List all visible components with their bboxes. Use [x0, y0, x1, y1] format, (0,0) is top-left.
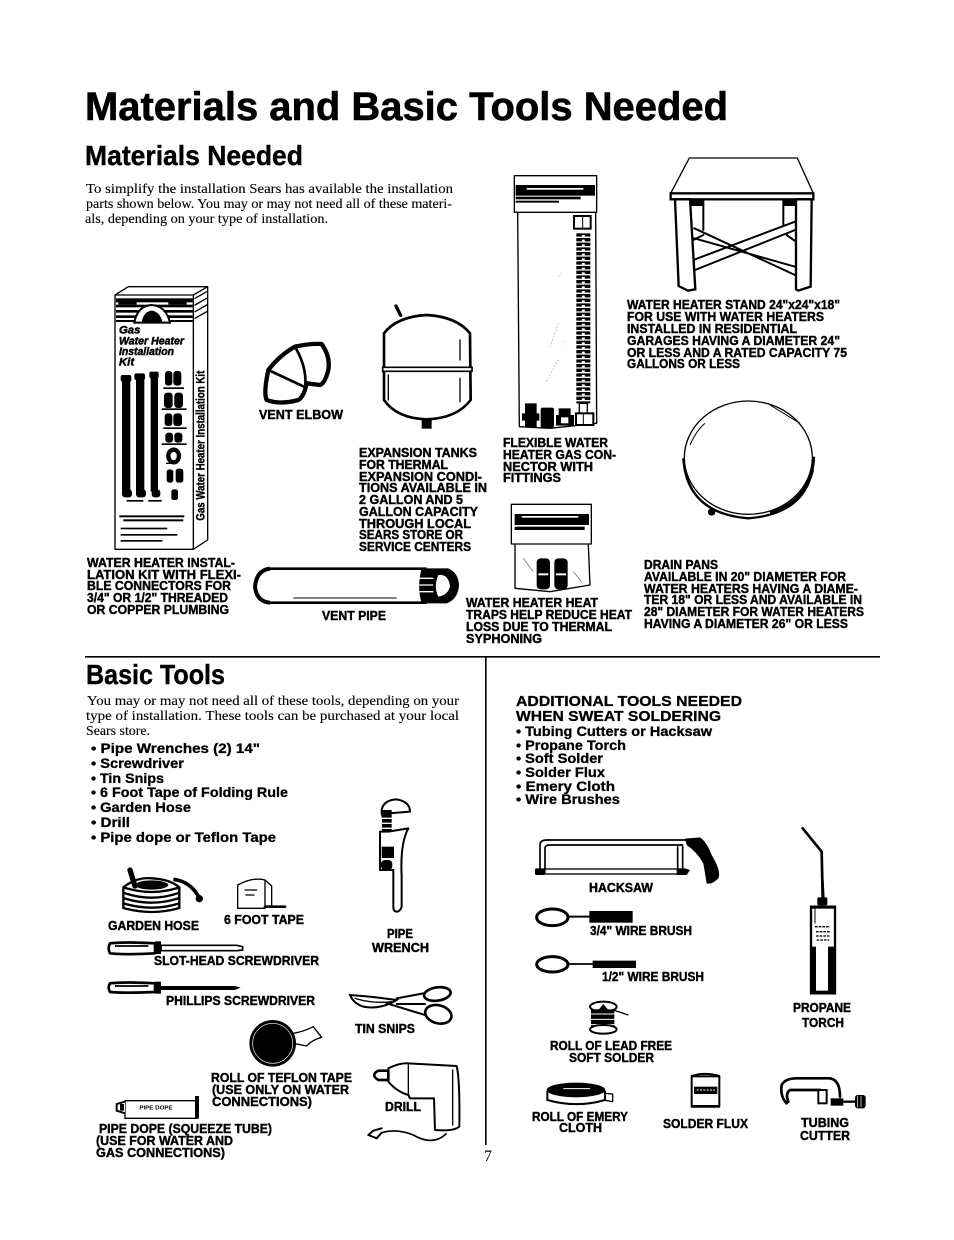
label: tubing cutter: TUBING	[801, 1116, 849, 1130]
label: vent pipe: VENT PIPE	[322, 609, 386, 623]
text block: basic tools intro	[86, 694, 459, 739]
label: drain pans: TER 18" OR LESS AND AVAILABLE IN	[644, 593, 862, 607]
label: pipe wrench: WRENCH	[372, 941, 429, 955]
label: teflon tape: CONNECTIONS)	[212, 1095, 312, 1109]
label: pipe wrench: PIPE	[387, 927, 413, 941]
label: water heater stand: GARAGES HAVING A DIAMETER 24"	[627, 334, 840, 348]
label: drain pans: AVAILABLE IN 20" DIAMETER FOR	[644, 570, 846, 584]
icon: tubing cutter	[781, 1078, 866, 1108]
label: lead free solder: ROLL OF LEAD FREE	[550, 1039, 672, 1053]
label: drill: DRILL	[385, 1100, 421, 1114]
label: water heater stand: WATER HEATER STAND 24"x24"x18"	[627, 298, 840, 312]
label: installation kit: WATER HEATER INSTAL-	[87, 556, 235, 570]
list: basic tools: • Garden Hose	[91, 799, 191, 815]
list: additional tools	[516, 723, 712, 807]
icon: 1/2 wire brush	[537, 957, 636, 972]
label: expansion tanks: SERVICE CENTERS	[359, 540, 471, 554]
label: flexible connector: NECTOR WITH	[503, 460, 593, 474]
label: expansion tanks: SEARS STORE OR	[359, 528, 463, 542]
icon: expansion tank	[383, 306, 472, 429]
label: slot-head screwdriver: SLOT-HEAD SCREWDRIVER	[154, 954, 319, 968]
label: installation kit: OR COPPER PLUMBING	[87, 603, 229, 617]
label: 3/4 wire brush: 3/4" WIRE BRUSH	[590, 924, 692, 938]
label: emery cloth: ROLL OF EMERY	[532, 1110, 629, 1124]
list: basic tools: • Pipe dope or Teflon Tape	[91, 829, 276, 845]
label: flexible connector: FLEXIBLE WATER	[503, 436, 608, 450]
icon: garden hose	[123, 870, 203, 912]
icon: water heater installation kit box: Gas	[119, 325, 140, 337]
label: teflon tape: ROLL OF TEFLON TAPE	[211, 1071, 352, 1085]
text block: basic tools intro: type of installation. These tools can be purchased at your local	[86, 709, 459, 724]
heading: additional tools: ADDITIONAL TOOLS NEEDED	[516, 693, 742, 710]
label: installation kit: LATION KIT WITH FLEXI-	[87, 568, 241, 582]
label: hacksaw: HACKSAW	[589, 881, 653, 895]
label: installation kit: 3/4" OR 1/2" THREADED	[87, 591, 228, 605]
label: expansion tanks: 2 GALLON AND 5	[359, 493, 463, 507]
label: pipe dope: GAS CONNECTIONS)	[96, 1146, 225, 1160]
label: pipe wrench	[372, 927, 429, 955]
icon: solder spool	[590, 1002, 628, 1034]
label: propane torch: PROPANE	[793, 1001, 851, 1015]
list: additional tools: • Propane Torch	[516, 737, 626, 753]
label: tubing cutter: CUTTER	[800, 1129, 850, 1143]
label: pipe dope	[96, 1122, 272, 1160]
panel: additional tools	[516, 693, 866, 1143]
list: additional tools: • Solder Flux	[516, 764, 605, 780]
icon: pipe dope tube: PIPE DOPE	[139, 1105, 173, 1111]
text block: materials intro: als, depending on your type of installation.	[85, 212, 328, 227]
label: teflon tape: (USE ONLY ON WATER	[212, 1083, 349, 1097]
label: phillips screwdriver: PHILLIPS SCREWDRIVER	[166, 994, 315, 1008]
label: pipe dope: PIPE DOPE (SQUEEZE TUBE)	[99, 1122, 272, 1136]
heading: additional tools: WHEN SWEAT SOLDERING	[516, 708, 721, 725]
list: basic tools: • Tin Snips	[91, 770, 164, 786]
label: water heater stand: GALLONS OR LESS	[627, 357, 740, 371]
icon: pipe dope tube	[117, 1096, 199, 1119]
label: flexible connector: HEATER GAS CON-	[503, 448, 616, 462]
label: expansion tanks: FOR THERMAL	[359, 458, 448, 472]
text block: basic tools intro: You may or may not need all of these tools, depending on your	[87, 694, 459, 709]
label: expansion tanks: EXPANSION TANKS	[359, 446, 477, 460]
panel: materials needed	[85, 140, 864, 646]
label: propane torch: TORCH	[802, 1016, 844, 1030]
label: lead free solder: SOFT SOLDER	[569, 1051, 654, 1065]
icon: water heater installation kit box: Water Heater	[119, 335, 185, 347]
text block: materials intro: parts shown below. You may or may not need all of these materi-	[86, 197, 452, 212]
icon: water heater installation kit box: Installation	[119, 346, 174, 358]
label: water heater stand: INSTALLED IN RESIDENTIAL	[627, 322, 797, 336]
list: basic tools	[91, 740, 288, 845]
label: expansion tanks: TIONS AVAILABLE IN	[359, 481, 487, 495]
label: tin snips: TIN SNIPS	[355, 1022, 415, 1036]
icon: tape measure	[238, 879, 285, 908]
label: installation kit: BLE CONNECTORS FOR	[87, 579, 231, 593]
label: tubing cutter	[800, 1116, 850, 1143]
label: garden hose: GARDEN HOSE	[108, 919, 199, 933]
icon: heat trap package	[511, 504, 591, 592]
label: expansion tanks: GALLON CAPACITY	[359, 505, 479, 519]
icon: 3/4 wire brush	[537, 909, 633, 926]
icon: water heater installation kit box: Gas Water Heater Installation Kit	[194, 371, 208, 521]
icon: water heater installation kit box	[115, 287, 208, 549]
icon: flexible gas connector package	[514, 176, 597, 428]
label: flexible connector	[503, 436, 616, 485]
label: vent elbow: VENT ELBOW	[259, 408, 343, 422]
list: basic tools: • 6 Foot Tape of Folding Rule	[91, 784, 288, 800]
label: heat traps: SYPHONING	[466, 632, 542, 646]
icon: hacksaw	[535, 837, 719, 884]
label: expansion tanks: EXPANSION CONDI-	[359, 470, 482, 484]
list: basic tools: • Screwdriver	[91, 755, 185, 771]
label: lead free solder	[550, 1039, 672, 1065]
icon: slot-head screwdriver	[109, 941, 243, 954]
icon: solder flux can	[691, 1074, 720, 1108]
label: drain pans: HAVING A DIAMETER 26" OR LESS	[644, 617, 848, 631]
label: water heater stand: OR LESS AND A RATED CAPACITY 75	[627, 346, 847, 360]
text block: materials intro	[85, 182, 453, 227]
label: teflon tape	[211, 1071, 352, 1109]
icon: phillips screwdriver	[109, 982, 241, 994]
label: emery cloth	[532, 1110, 629, 1135]
heading: basic tools: Basic Tools	[86, 659, 225, 690]
label: emery cloth: CLOTH	[559, 1121, 602, 1135]
list: additional tools: • Tubing Cutters or Hacksaw	[516, 723, 712, 739]
icon: vent elbow	[265, 344, 329, 402]
icon: drain pan	[683, 401, 814, 518]
label: water heater stand: FOR USE WITH WATER HEATERS	[627, 310, 824, 324]
icon: propane torch	[803, 828, 835, 994]
list: basic tools: • Drill	[91, 814, 130, 830]
title: Materials and Basic Tools Needed	[85, 85, 728, 129]
label: 6 foot tape: 6 FOOT TAPE	[224, 913, 304, 927]
icon: emery cloth roll	[547, 1083, 613, 1104]
icon: water heater stand	[671, 158, 813, 291]
label: pipe dope: (USE FOR WATER AND	[96, 1134, 233, 1148]
label: water heater stand	[627, 298, 847, 371]
label: drain pans: 28" DIAMETER FOR WATER HEATERS	[644, 605, 864, 619]
panel: basic tools	[86, 659, 459, 1160]
text block: basic tools intro: Sears store.	[86, 724, 150, 739]
page number: 7	[484, 1148, 492, 1165]
icon: drill	[368, 1063, 459, 1140]
icon: pipe wrench	[380, 799, 410, 912]
label: heat traps: WATER HEATER HEAT	[466, 596, 598, 610]
label: heat traps: TRAPS HELP REDUCE HEAT	[466, 608, 632, 622]
heading: additional tools	[516, 693, 742, 725]
label: installation kit	[87, 556, 241, 617]
label: propane torch	[793, 1001, 851, 1030]
text block: materials intro: To simplify the installation Sears has available the installation	[86, 182, 453, 197]
icon: vent pipe	[255, 568, 459, 603]
label: solder flux: SOLDER FLUX	[663, 1117, 749, 1131]
list: additional tools: • Emery Cloth	[516, 778, 615, 794]
icon: water heater installation kit box: Kit	[119, 357, 135, 369]
label: flexible connector: FITTINGS	[503, 471, 561, 485]
icon: tin snips	[350, 986, 454, 1026]
label: heat traps	[466, 596, 632, 646]
list: additional tools: • Soft Solder	[516, 750, 604, 766]
label: expansion tanks: THROUGH LOCAL	[359, 517, 471, 531]
heading: materials needed: Materials Needed	[85, 140, 303, 171]
label: heat traps: LOSS DUE TO THERMAL	[466, 620, 612, 634]
list: additional tools: • Wire Brushes	[516, 791, 620, 807]
label: drain pans: WATER HEATERS HAVING A DIAME-	[644, 582, 858, 596]
label: expansion tanks	[359, 446, 487, 554]
list: basic tools: • Pipe Wrenches (2) 14"	[91, 740, 260, 756]
label: 1/2 wire brush: 1/2" WIRE BRUSH	[602, 970, 704, 984]
label: drain pans: DRAIN PANS	[644, 558, 718, 572]
icon: teflon tape roll	[249, 1020, 322, 1067]
label: drain pans	[644, 558, 864, 631]
